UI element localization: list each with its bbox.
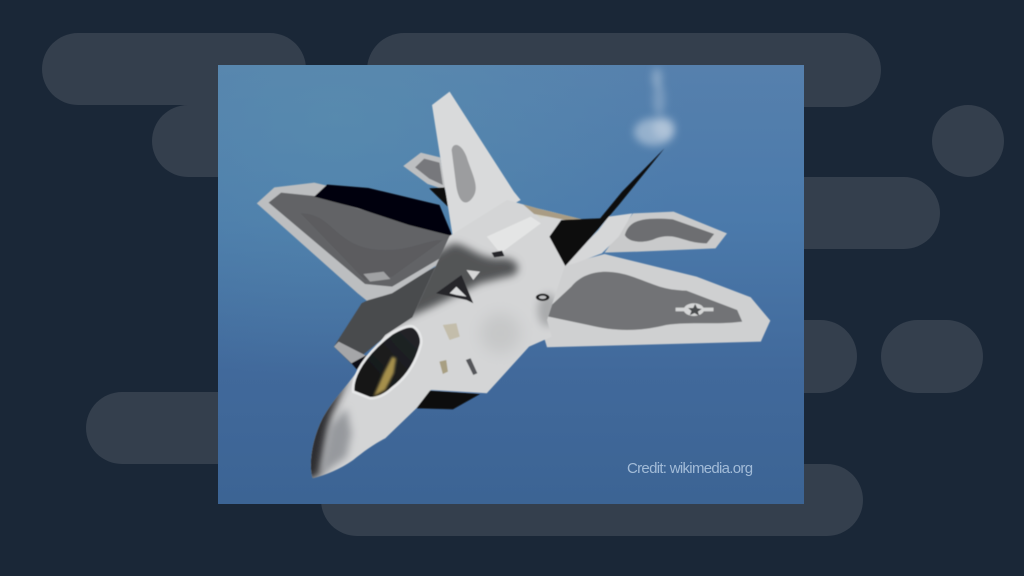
right vertical tail [549,148,664,266]
background pill: right lower [700,320,857,393]
sky [218,65,804,504]
vertical tail: left [432,92,521,238]
right wing [538,254,770,347]
background pill: far right lower [881,320,983,393]
lower forward wing root [334,260,450,375]
fuselage markings [436,251,549,375]
fighter jet [257,92,770,483]
background pill: upper left second row [152,105,352,177]
photo: fighter jet against blue sky [218,65,804,504]
background pill: top left [42,33,306,105]
exhaust cloud [634,68,675,146]
photo credit: Credit: wikimedia.org [627,460,752,477]
cockpit canopy [353,326,421,398]
nose shading [310,378,353,478]
background pill: right middle [700,177,940,249]
black underbelly [416,391,480,409]
background pill: lower left [86,392,336,464]
right horizontal stabilizer [605,212,727,253]
left rear stabilizer [403,153,450,208]
fuselage [310,202,582,478]
left wing black shadow [314,185,452,236]
background circle: right [932,105,1004,177]
background pill: bottom [321,464,863,536]
background pill: top wide [367,33,881,107]
star insignia [676,303,713,316]
left wing [257,183,467,301]
